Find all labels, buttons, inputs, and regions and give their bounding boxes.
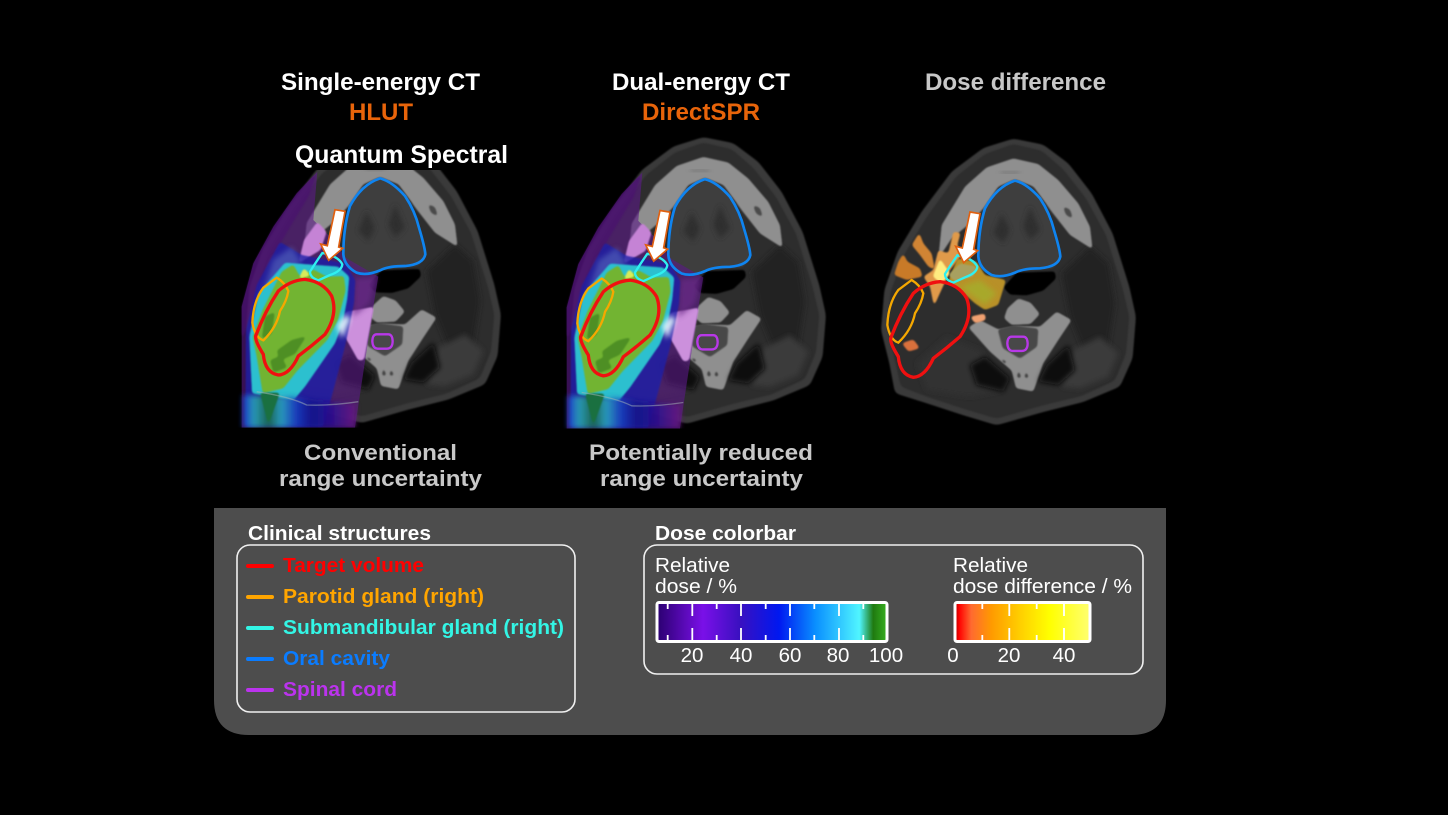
caption: conventional range uncertainty: Conventional bbox=[304, 440, 457, 465]
dose colorbar box bbox=[644, 545, 1143, 674]
colorbar: relative dose difference bbox=[947, 554, 1132, 667]
legend item: parotid gland: Parotid gland (right) bbox=[283, 586, 484, 608]
CT scan panel: single-energy with dose overlay bbox=[238, 170, 502, 428]
legend panel bbox=[214, 508, 1166, 735]
clinical structures legend bbox=[237, 545, 575, 712]
legend item: spinal cord: Spinal cord bbox=[283, 679, 397, 701]
title: dose difference: Dose difference bbox=[925, 69, 1106, 96]
caption: conventional range uncertainty: range uncertainty bbox=[279, 466, 483, 491]
dose difference map bbox=[894, 232, 1006, 352]
colorbar: relative dose: 40 bbox=[730, 644, 752, 667]
colorbar: relative dose: Relative bbox=[655, 554, 730, 577]
colorbar: relative dose difference: 20 bbox=[998, 644, 1020, 667]
CT scan panel: dose difference bbox=[881, 139, 1136, 425]
caption: potentially reduced range uncertainty bbox=[589, 440, 813, 491]
heading: clinical structures: Clinical structures bbox=[248, 523, 431, 545]
colorbar: relative dose: 60 bbox=[779, 644, 801, 667]
colorbar: relative dose difference: 40 bbox=[1053, 644, 1075, 667]
colorbar: relative dose: 100 bbox=[869, 644, 903, 667]
title: dual-energy CT: DirectSPR bbox=[642, 99, 760, 126]
title: dual-energy CT bbox=[612, 69, 790, 126]
CT scan panel: dual-energy with dose overlay bbox=[567, 137, 826, 428]
colorbar: relative dose difference: dose difference / % bbox=[953, 575, 1132, 598]
title: single-energy CT: Single-energy CT bbox=[281, 69, 480, 96]
title: single-energy CT bbox=[281, 69, 480, 126]
heading: dose colorbar: Dose colorbar bbox=[655, 523, 796, 545]
colorbar: relative dose bbox=[655, 554, 903, 667]
overlay label: Quantum Spectral: Quantum Spectral bbox=[295, 141, 508, 169]
colorbar: relative dose: 20 bbox=[681, 644, 703, 667]
title: single-energy CT: HLUT bbox=[349, 99, 413, 126]
legend item: oral cavity: Oral cavity bbox=[283, 648, 391, 670]
caption: conventional range uncertainty bbox=[279, 440, 483, 491]
colorbar: relative dose: 80 bbox=[827, 644, 849, 667]
title: dual-energy CT: Dual-energy CT bbox=[612, 69, 790, 96]
legend item: target volume: Target volume bbox=[283, 555, 424, 577]
colorbar: relative dose difference: Relative bbox=[953, 554, 1028, 577]
caption: potentially reduced range uncertainty: range uncertainty bbox=[600, 466, 804, 491]
colorbar: relative dose: dose / % bbox=[655, 575, 737, 598]
colorbar: relative dose difference: 0 bbox=[947, 644, 959, 667]
caption: potentially reduced range uncertainty: Potentially reduced bbox=[589, 440, 813, 465]
legend item: submandibular gland: Submandibular gland (right) bbox=[283, 617, 564, 639]
